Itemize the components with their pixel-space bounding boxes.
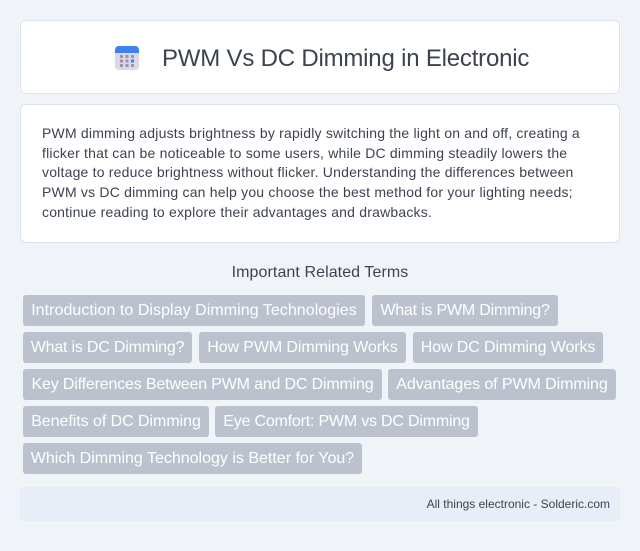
tag: Eye Comfort: PWM vs DC Dimming: [223, 413, 470, 430]
tag: [23, 332, 192, 363]
tag: [23, 406, 209, 437]
tag: What is DC Dimming?: [31, 339, 184, 356]
tag: [388, 369, 616, 400]
description text: PWM dimming adjusts brightness by rapidly switching the light on and off, creating a: [42, 125, 580, 141]
description text: voltage to reduce brightness without flicker. Understanding the differences between: [42, 164, 574, 180]
tag: Introduction to Display Dimming Technologies: [31, 302, 357, 319]
header panel: [20, 20, 620, 94]
description text: continue reading to explore their advantages and drawbacks.: [42, 204, 432, 220]
description text: flicker that can be noticeable to some users, while DC dimming steadily lowers the: [42, 145, 567, 161]
tag: Key Differences Between PWM and DC Dimming: [31, 376, 374, 393]
tag: [23, 369, 382, 400]
tag: [23, 443, 362, 474]
tag: [215, 406, 478, 437]
footer bar: [20, 487, 620, 521]
panel: description: [20, 104, 620, 243]
icon: calendar grid: [115, 46, 139, 70]
tag: Which Dimming Technology is Better for You?: [31, 450, 354, 467]
tag: [23, 295, 365, 326]
tag: [199, 332, 406, 363]
tag: Advantages of PWM Dimming: [396, 376, 608, 393]
tag: Benefits of DC Dimming: [31, 413, 201, 430]
tag: How DC Dimming Works: [421, 339, 595, 356]
tag: How PWM Dimming Works: [207, 339, 398, 356]
heading: important related terms: Important Related Terms: [232, 264, 408, 281]
tag list: [23, 295, 616, 474]
tag: [413, 332, 603, 363]
description text: PWM vs DC dimming can help you choose the best method for your lighting needs;: [42, 184, 573, 200]
tag: [372, 295, 558, 326]
tag: What is PWM Dimming?: [380, 302, 550, 319]
description text: [42, 125, 580, 220]
title: PWM Vs DC Dimming in Electronic: [162, 45, 529, 72]
footer text: All things electronic - Solderic.com: [427, 497, 610, 511]
